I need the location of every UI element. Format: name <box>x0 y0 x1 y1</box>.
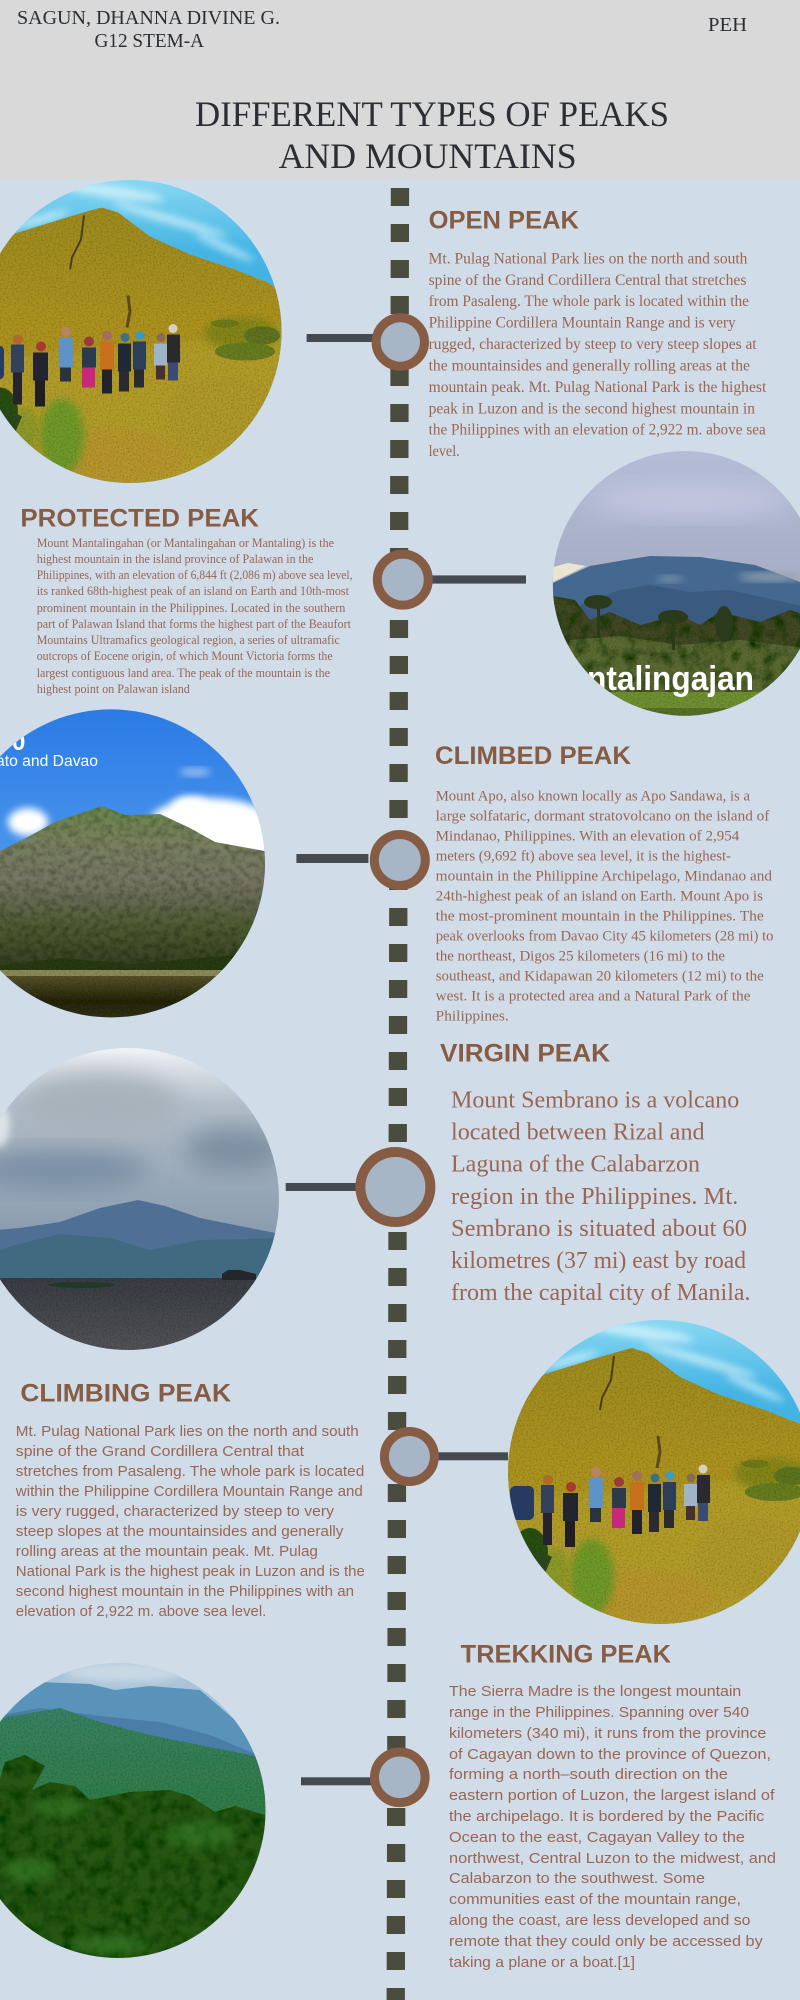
body text: part of Palawan Island that forms the highest part of the Beaufort <box>37 617 351 631</box>
body text: second highest mountain in the Philippines with an <box>16 1584 354 1600</box>
connector bar <box>301 1777 371 1785</box>
body text: peak overlooks from Davao City 45 kilometers (28 mi) to <box>436 929 774 945</box>
body text: The Sierra Madre is the longest mountain <box>449 1683 741 1700</box>
panel: virgin peak <box>0 1040 750 1358</box>
heading: VIRGIN PEAK <box>440 1040 610 1068</box>
body text: from Pasaleng. The whole park is located within the <box>429 293 749 310</box>
panel: protected peak <box>20 450 800 722</box>
palm trees <box>584 595 733 650</box>
body text: meters (9,692 ft) above sea level, it is the highest- <box>436 849 731 865</box>
body text: largest contiguous land area. The peak of the mountain is the <box>37 666 330 680</box>
body text: National Park is the highest peak in Luzon and is the <box>16 1564 365 1580</box>
body text <box>429 250 767 460</box>
body text: west. It is a protected area and a Natural Park of the <box>436 989 751 1005</box>
panel: climbing peak <box>15 1312 800 1637</box>
author name and class <box>17 7 280 52</box>
body text <box>449 1683 776 1971</box>
body text: Ocean to the east, Cagayan Valley to the <box>449 1829 745 1846</box>
timeline node <box>384 1432 434 1482</box>
body text: the mountainsides and generally rolling areas at the <box>429 358 750 375</box>
author name and class: G12 STEM-A <box>94 30 205 52</box>
timeline node <box>377 554 428 605</box>
timeline node <box>374 834 425 886</box>
body text: stretches from Pasaleng. The whole park is located <box>16 1464 364 1480</box>
body text: remote that they could only be accessed by <box>449 1933 763 1950</box>
heading: OPEN PEAK <box>429 207 579 235</box>
connector bar <box>296 854 368 863</box>
photo caption fragments <box>0 736 98 766</box>
photo: Sierra Madre forest <box>0 1660 275 1970</box>
body text: its ranked 68th-highest peak of an island on Earth and 10th-most <box>37 584 350 598</box>
title <box>195 94 669 176</box>
body text: mountain in the Philippine Archipelago, Mindanao and <box>436 869 773 885</box>
body text: highest point on Palawan island <box>37 682 191 696</box>
heading: PROTECTED PEAK <box>20 504 259 532</box>
connector bar <box>286 1183 357 1191</box>
body text: of Cagayan down to the province of Quezon, <box>449 1746 771 1763</box>
body text: Mountains Ultramafics geological region, a series of ultramafic <box>37 633 340 647</box>
connector bar <box>432 575 526 584</box>
photo: Mount Sembrano <box>0 1045 285 1358</box>
body text: 24th-highest peak of an island on Earth. Mount Apo is <box>436 889 763 905</box>
body text: steep slopes at the mountainsides and generally <box>16 1524 344 1540</box>
body text: Mount Sembrano is a volcano <box>451 1087 739 1113</box>
body text: kilometres (37 mi) east by road <box>451 1248 746 1274</box>
heading: CLIMBING PEAK <box>20 1380 231 1408</box>
body text: mountain peak. Mt. Pulag National Park is the highest <box>429 379 767 396</box>
connector bar <box>307 334 373 342</box>
body text: Philippines, with an elevation of 6,844 ft (2,086 m) above sea level, <box>37 568 353 582</box>
body text: along the coast, are less developed and so <box>449 1912 750 1929</box>
tree canopy highlights <box>4 1798 234 1954</box>
body text: eastern portion of Luzon, the largest island of <box>449 1787 775 1804</box>
body text: spine of the Grand Cordillera Central that <box>16 1444 304 1460</box>
body text: Mount Apo, also known locally as Apo Sandawa, is a <box>436 789 750 805</box>
body text: Sembrano is situated about 60 <box>451 1216 747 1242</box>
body text: elevation of 2,922 m. above sea level. <box>16 1604 266 1620</box>
body text: kilometers (340 mi), it runs from the province <box>449 1725 766 1742</box>
photo caption fragment: ntalingajan <box>587 660 754 698</box>
body text: southeast, and Kidapawan 20 kilometers (12 mi) to the <box>436 969 764 985</box>
heading: CLIMBED PEAK <box>435 742 631 770</box>
timeline node <box>360 1152 430 1222</box>
photo: Mt. Pulag hikers <box>508 1320 800 1624</box>
body text: spine of the Grand Cordillera Central that stretches <box>429 272 746 289</box>
body text: Mt. Pulag National Park lies on the north and south <box>16 1424 359 1440</box>
body text: taking a plane or a boat.[1] <box>449 1954 635 1971</box>
body text: the Philippines with an elevation of 2,922 m. above sea <box>429 422 766 439</box>
body text: rugged, characterized by steep to very steep slopes at <box>429 336 757 353</box>
body text: peak in Luzon and is the second highest mountain in <box>429 400 755 418</box>
photo: Mount Apo <box>0 705 280 1026</box>
photo caption fragments: 0 <box>12 729 25 756</box>
body text <box>37 536 353 696</box>
body text: forming a north–south direction on the <box>449 1766 728 1783</box>
body text: level. <box>429 443 460 460</box>
body text <box>451 1087 750 1306</box>
body text: Calabarzon to the southwest. Some <box>449 1870 705 1887</box>
author name and class: SAGUN, DHANNA DIVINE G. <box>17 7 280 29</box>
label: PEH: PEH <box>708 14 747 36</box>
body text: the archipelago. It is bordered by the Pacific <box>449 1808 765 1825</box>
body text: the northeast, Digos 25 kilometers (16 mi) to the <box>436 949 725 965</box>
photo: Mt. Pulag hikers <box>0 180 282 483</box>
body text: region in the Philippines. Mt. <box>451 1184 738 1210</box>
body text <box>15 1424 365 1620</box>
panel: open peak <box>0 172 767 496</box>
body text: highest mountain in the island province of Palawan in the <box>37 552 314 566</box>
body text: Mount Mantalingahan (or Mantalingahan or Mantaling) is the <box>37 536 334 550</box>
panel: climbed peak <box>0 705 774 1026</box>
body text: Mt. Pulag National Park lies on the north and south <box>429 250 748 267</box>
body text: the most-prominent mountain in the Philippines. The <box>436 909 764 925</box>
body text <box>436 789 774 1025</box>
timeline node <box>376 318 424 366</box>
header band <box>0 0 800 179</box>
heading: TREKKING PEAK <box>461 1641 671 1669</box>
body text: communities east of the mountain range, <box>449 1891 741 1908</box>
body text: rolling areas at the mountain peak. Mt. Pulag <box>16 1544 318 1560</box>
connector bar <box>438 1452 508 1460</box>
body text: is very rugged, characterized by steep to very <box>16 1504 335 1520</box>
panel: trekking peak <box>0 1641 776 1971</box>
body text: northwest, Central Luzon to the midwest, and <box>449 1850 776 1867</box>
body text: range in the Philippines. Spanning over 540 <box>449 1704 749 1721</box>
timeline node <box>374 1752 425 1803</box>
body text: prominent mountain in the Philippines. Located in the southern <box>37 601 346 615</box>
photo: Mt. Mantalingahan <box>550 450 800 722</box>
body text: Philippine Cordillera Mountain Range and is very <box>429 315 736 332</box>
title: DIFFERENT TYPES OF PEAKS <box>195 94 669 134</box>
body text: Mindanao, Philippines. With an elevation of 2,954 <box>436 829 740 845</box>
body text: from the capital city of Manila. <box>451 1280 750 1306</box>
timeline dashed spine <box>387 188 409 2000</box>
body text: large solfataric, dormant stratovolcano on the island of <box>436 809 769 825</box>
body text: Laguna of the Calabarzon <box>451 1152 700 1178</box>
body text: located between Rizal and <box>451 1119 705 1145</box>
body text: Philippines. <box>436 1009 509 1025</box>
body text: outcrops of Eocene origin, of which Mount Victoria forms the <box>37 649 333 663</box>
body text: within the Philippine Cordillera Mountain Range and <box>15 1484 363 1500</box>
title: AND MOUNTAINS <box>279 136 577 176</box>
